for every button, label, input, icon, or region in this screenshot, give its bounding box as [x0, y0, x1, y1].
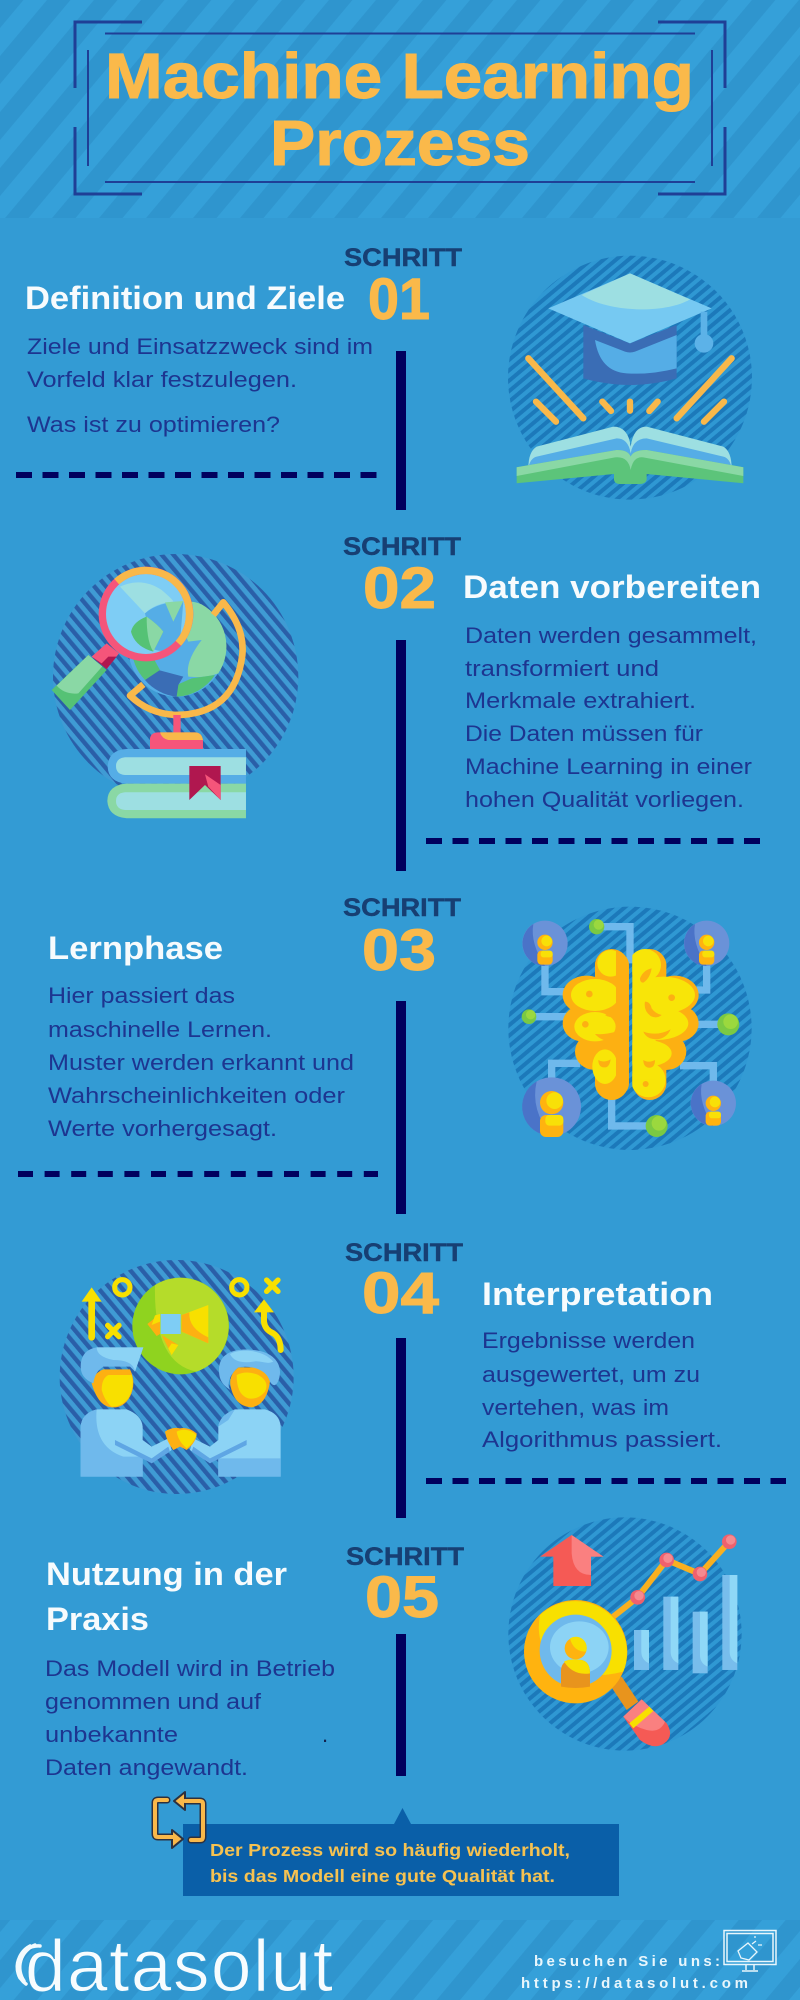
text block: step 3: Muster werden erkannt und	[48, 1050, 354, 1075]
step label 1: SCHRITT	[344, 244, 462, 272]
panel: header	[0, 0, 800, 218]
panel: step 2	[52, 533, 761, 871]
text block: step 1: Vorfeld klar festzulegen.	[27, 367, 297, 392]
text block: step 1: Was ist zu optimieren?	[27, 412, 280, 437]
text block: step 5: unbekannte	[45, 1722, 178, 1747]
icon: repeat cycle	[155, 1792, 203, 1848]
callout: process repeats: bis das Modell eine gute Qualität hat.	[210, 1866, 555, 1886]
text block: step 4: vertehen, was im	[482, 1395, 669, 1420]
heading: Nutzung in der Praxis: Nutzung in der	[46, 1556, 287, 1592]
icon: graduation cap and book	[508, 256, 752, 500]
text block: step 2: Die Daten müssen für	[465, 721, 703, 746]
panel: step 4	[60, 1239, 786, 1518]
icon: handshake and megaphone	[60, 1260, 294, 1494]
text block: step 4: Ergebnisse werden	[482, 1328, 695, 1353]
step label 3: SCHRITT	[343, 894, 461, 922]
link text	[521, 1953, 748, 1992]
heading: Nutzung in der Praxis: Praxis	[46, 1601, 149, 1637]
step number 05: 05	[365, 1565, 439, 1630]
text block: step 5: Daten angewandt.	[45, 1755, 248, 1780]
icon: monitor with hand	[724, 1930, 776, 1971]
text block: step 2: Daten werden gesammelt,	[465, 623, 757, 648]
text block: step 5	[45, 1656, 335, 1780]
heading: Interpretation: Interpretation	[482, 1276, 713, 1312]
heading: Daten vorbereiten: Daten vorbereiten	[463, 569, 761, 605]
text block: step 4: ausgewertet, um zu	[482, 1362, 700, 1387]
step label 2: SCHRITT	[343, 533, 461, 561]
text block: step 3	[48, 983, 354, 1141]
text block: step 3: Wahrscheinlichkeiten oder	[48, 1083, 345, 1108]
text block: step 2: Merkmale extrahiert.	[465, 688, 696, 713]
text block: step 5: genommen und auf	[45, 1689, 262, 1714]
icon: globe, magnifier and books	[52, 554, 298, 818]
step number 01: 01	[368, 267, 430, 332]
link text: besuchen Sie uns:	[534, 1953, 720, 1970]
callout: process repeats: Der Prozess wird so häufig wiederholt,	[210, 1840, 570, 1860]
step number 04: 04	[362, 1261, 439, 1326]
text block: step 4: Algorithmus passiert.	[482, 1427, 722, 1452]
panel: step 5	[45, 1517, 742, 1780]
title: Prozess	[270, 107, 530, 179]
title	[105, 40, 694, 179]
step number 03: 03	[362, 918, 436, 983]
text block: step 1: Ziele und Einsatzzweck sind im	[27, 334, 373, 359]
text block: step 3: Werte vorhergesagt.	[48, 1116, 277, 1141]
text block: step 4	[482, 1328, 722, 1452]
text block: step 5: Das Modell wird in Betrieb	[45, 1656, 335, 1681]
text block: step 2: transformiert und	[465, 656, 659, 681]
step number 02: 02	[363, 556, 436, 621]
text block: step 2	[465, 623, 757, 812]
panel: step 1	[16, 244, 752, 510]
text block: step 1	[27, 334, 373, 437]
panel: step 3	[18, 894, 752, 1214]
text block: step 3: maschinelle Lernen.	[48, 1017, 272, 1042]
title: Machine Learning	[105, 40, 694, 112]
link text: https://datasolut.com	[521, 1975, 748, 1992]
text block: step 2: Machine Learning in einer	[465, 754, 752, 779]
text block: step 5: .	[322, 1722, 328, 1747]
step label 5: SCHRITT	[346, 1543, 464, 1571]
heading: Lernphase: Lernphase	[48, 930, 223, 966]
text block: step 2: hohen Qualität vorliegen.	[465, 787, 744, 812]
panel: footer	[0, 1920, 800, 2000]
text block: step 3: Hier passiert das	[48, 983, 235, 1008]
icon: brain network	[508, 907, 752, 1150]
heading: Nutzung in der Praxis	[46, 1556, 287, 1637]
icon: magnifier and growth chart	[508, 1517, 742, 1751]
callout: process repeats	[183, 1808, 619, 1896]
step label 4: SCHRITT	[345, 1239, 463, 1267]
heading: Definition und Ziele: Definition und Ziele	[25, 280, 345, 316]
